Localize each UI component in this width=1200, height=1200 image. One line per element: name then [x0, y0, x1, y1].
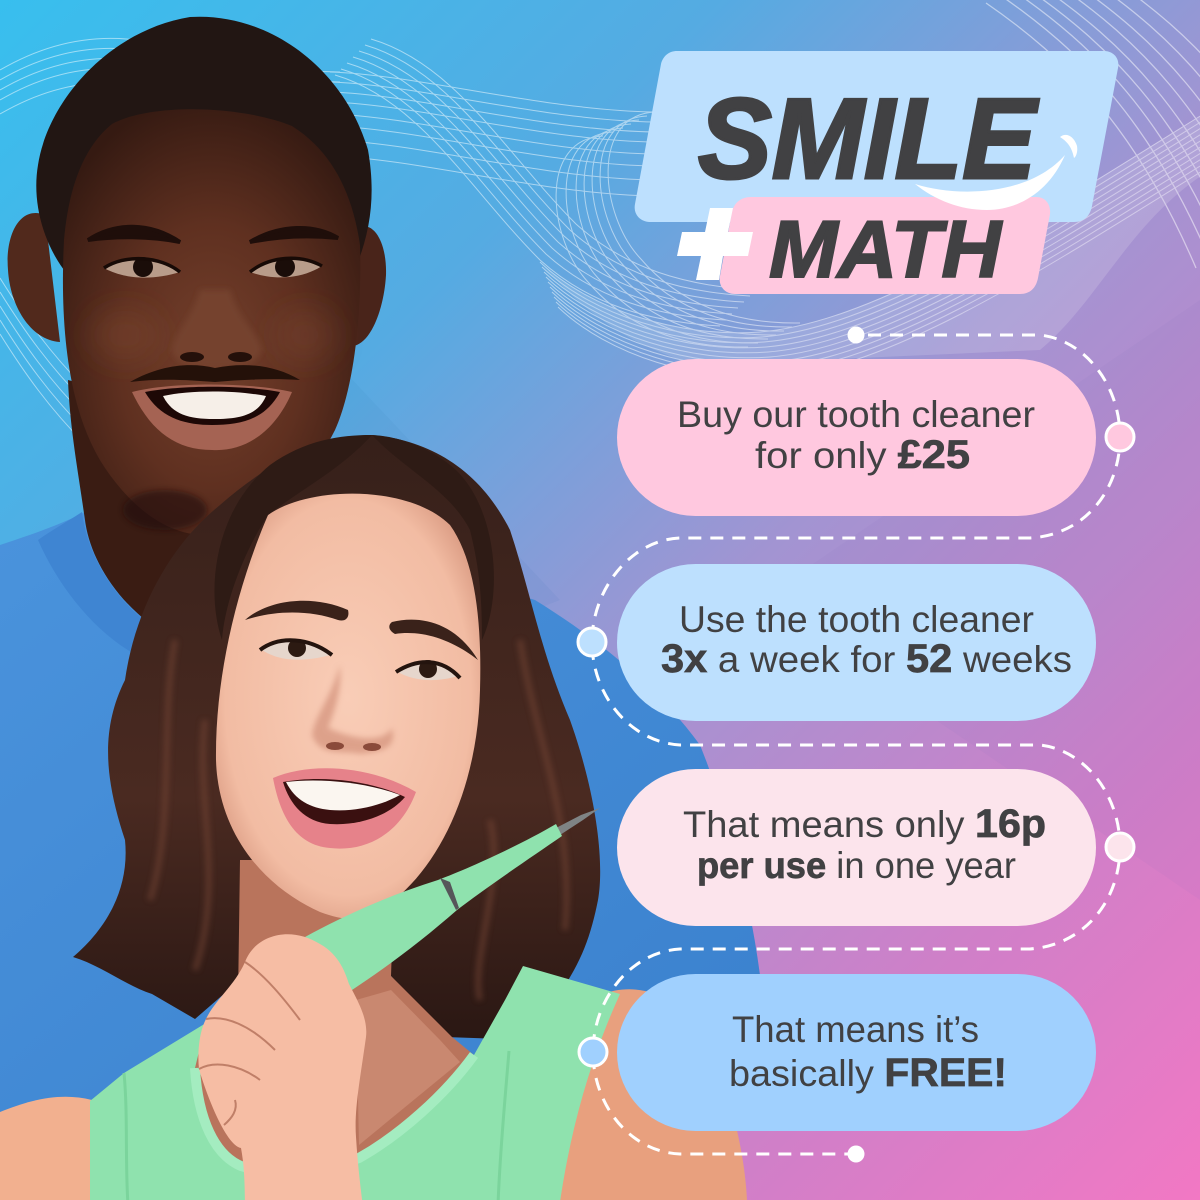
step 3 line 1: That means only 16p — [683, 802, 1046, 846]
toothbrush tool — [270, 808, 600, 1010]
woman: neck and chest — [190, 860, 480, 1185]
man: t-shirt collar — [38, 512, 172, 662]
tool: body — [305, 824, 562, 990]
man: eyes — [104, 257, 322, 278]
tool: silver band — [440, 878, 459, 910]
node 3 — [1106, 833, 1134, 861]
background wave lines — [0, 0, 1200, 444]
node 4 — [579, 1038, 607, 1066]
step 1 pill — [617, 359, 1096, 516]
title: smile curve — [915, 135, 1077, 210]
tool: tip — [556, 808, 600, 835]
step 1 line 2: for only £25 — [755, 433, 970, 477]
title: math panel — [720, 197, 1050, 294]
woman — [0, 435, 747, 1200]
title: smile panel — [635, 51, 1118, 222]
woman: hair fringe — [214, 435, 494, 640]
woman: nose — [312, 665, 393, 754]
title: SMILE: SMILE — [698, 76, 1039, 203]
man: nose — [172, 290, 262, 368]
man: hair — [36, 17, 372, 270]
step 3 pill — [617, 769, 1096, 926]
background facets — [120, 250, 1200, 900]
step 2 line 1: Use the tooth cleaner — [679, 599, 1034, 640]
node 2 — [578, 628, 606, 656]
woman: mouth — [273, 768, 416, 849]
step 1 line 1: Buy our tooth cleaner — [677, 394, 1035, 435]
man: moustache — [130, 365, 300, 382]
step 4 line 2: basically FREE! — [729, 1051, 1007, 1095]
woman: face — [216, 494, 480, 919]
woman: hair — [73, 435, 600, 1040]
woman: neckline ribbing — [195, 1055, 474, 1173]
man: brows — [88, 227, 338, 242]
man — [0, 17, 747, 1200]
woman: hair highlights — [150, 640, 567, 1000]
hand — [198, 934, 366, 1200]
connector end dot — [848, 1146, 864, 1162]
step 3 line 2: per use in one year — [697, 845, 1016, 886]
woman: strap seams — [124, 1051, 509, 1200]
man: right ear — [352, 226, 386, 346]
man: left ear — [8, 213, 60, 342]
woman: eyes — [260, 639, 460, 680]
man: blue t-shirt — [0, 512, 760, 1150]
man: neck — [68, 380, 330, 640]
step 4 pill — [617, 974, 1096, 1131]
title: plus sign — [677, 208, 753, 280]
woman: green tank top — [90, 966, 620, 1200]
woman: right arm — [535, 989, 747, 1200]
dashed connector — [592, 335, 1120, 1154]
step 4 line 1: That means it’s — [732, 1009, 979, 1050]
woman: brows — [245, 601, 478, 660]
man: mouth — [132, 384, 292, 450]
man: cheek shading — [91, 309, 335, 361]
hand: finger creases — [199, 962, 300, 1125]
connector start dot — [848, 326, 864, 344]
man: face — [63, 109, 360, 535]
tool: dark handle — [270, 957, 320, 1010]
man: beard — [123, 490, 207, 530]
woman: left arm — [0, 1097, 95, 1200]
woman: chest light — [356, 990, 460, 1145]
node 1 — [1106, 423, 1134, 451]
title: MATH: MATH — [769, 205, 1003, 295]
step 2 pill — [617, 564, 1096, 721]
step 2 line 2: 3x a week for 52 weeks — [661, 637, 1072, 681]
